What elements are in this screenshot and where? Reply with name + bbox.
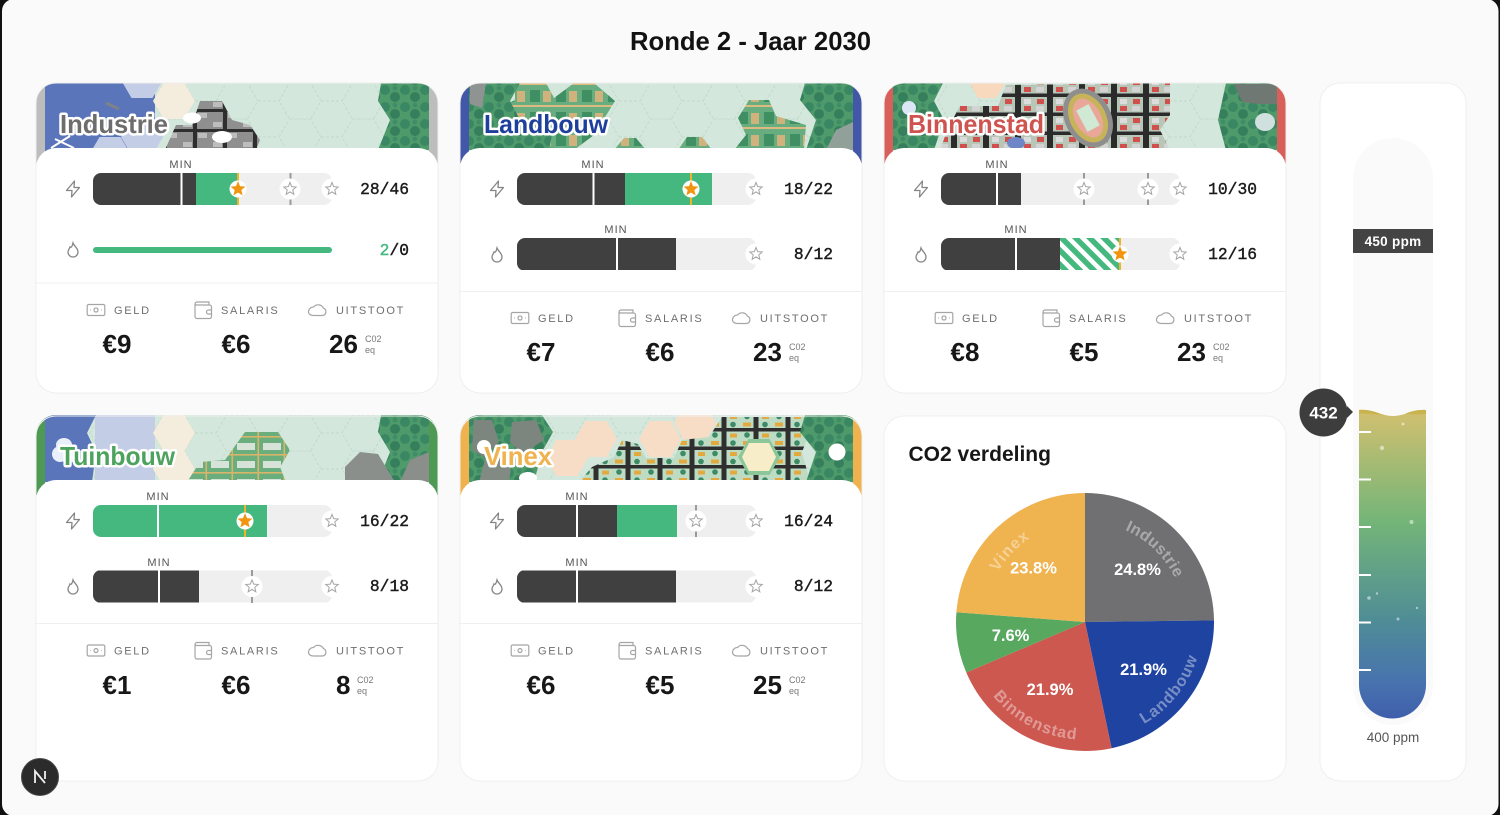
heat row [68, 241, 409, 260]
panel: Industrie [36, 62, 438, 393]
energy row: MIN [565, 491, 589, 503]
slice: Vinex [956, 493, 1085, 622]
map header: Tuinbouw [36, 415, 438, 496]
energy row: MIN [169, 159, 193, 171]
heat row: 8/12 [794, 577, 833, 596]
slice: Tuinbouw [956, 612, 1085, 672]
current value bubble: 432 [1309, 404, 1338, 422]
header label: Industrie [60, 109, 168, 139]
stats row: UITSTOOT [760, 646, 829, 658]
energy row [490, 491, 833, 537]
limit label [1353, 229, 1433, 253]
slice names: Industrie [1126, 520, 1182, 576]
stats row: €5 [1070, 337, 1098, 367]
stats row: GELD [538, 646, 575, 658]
card body [36, 480, 438, 781]
stats row: C02 [357, 675, 374, 685]
stats row: €8 [951, 337, 979, 367]
stats row: €6 [222, 670, 250, 700]
stats row: GELD [962, 313, 999, 325]
energy row [66, 159, 409, 205]
panel: CO2 verdeling [884, 416, 1286, 782]
stats row: SALARIS [1069, 313, 1127, 325]
energy row: 18/22 [784, 180, 833, 199]
stats row: SALARIS [221, 305, 279, 317]
panel: Vinex [460, 405, 862, 781]
panel: thermometer [1300, 83, 1466, 781]
stats row: €7 [527, 337, 555, 367]
card body [460, 480, 862, 781]
stats row: 23 [1177, 337, 1206, 367]
stats row: C02 [789, 675, 806, 685]
heat row: 8/18 [370, 577, 409, 596]
energy row: 10/30 [1208, 180, 1257, 199]
thermometer tube [1353, 138, 1433, 725]
stats row [87, 642, 405, 700]
minimum label: 400 ppm [1367, 730, 1419, 745]
stats row: 8 [336, 670, 350, 700]
stats row: eq [1213, 353, 1223, 363]
header label: Landbouw [484, 109, 609, 139]
stats row: GELD [114, 305, 151, 317]
heat row: 8/12 [794, 245, 833, 264]
stats row: eq [789, 686, 799, 696]
panel: Landbouw [460, 83, 862, 393]
energy row: 28/46 [360, 180, 409, 199]
stats row: GELD [114, 646, 151, 658]
map header: Landbouw [460, 84, 862, 164]
pie chart [956, 493, 1214, 751]
stats row: UITSTOOT [336, 305, 405, 317]
map header: Vinex [460, 415, 862, 496]
current value bubble [1300, 388, 1353, 436]
heat row: MIN [604, 224, 628, 236]
stats row: UITSTOOT [760, 313, 829, 325]
energy row [490, 159, 833, 205]
header label: Binnenstad [908, 109, 1044, 139]
stats row: C02 [789, 342, 806, 352]
stats row [511, 642, 829, 700]
stats row [511, 310, 829, 367]
heat row [68, 557, 409, 603]
stats row: SALARIS [221, 646, 279, 658]
heat row: MIN [1004, 224, 1028, 236]
bubbles [1367, 422, 1418, 620]
heat row: 12/16 [1208, 245, 1257, 264]
slice names: Vinex [988, 532, 1030, 568]
map header: Industrie [36, 84, 438, 164]
heat row [916, 224, 1257, 270]
stats row: 25 [753, 670, 782, 700]
stats row: €5 [646, 670, 674, 700]
slice percentages: 24.8% [1114, 561, 1161, 579]
heat row: 2/0 [380, 241, 409, 260]
stats row: eq [357, 686, 367, 696]
energy row: MIN [146, 491, 170, 503]
card body [36, 148, 438, 393]
card body [460, 148, 862, 393]
energy row: 16/22 [360, 512, 409, 531]
logo badge [22, 758, 58, 796]
slice percentages [992, 560, 1167, 699]
stats row: GELD [538, 313, 575, 325]
scale ticks [1359, 431, 1371, 671]
slice names: Binnenstad [994, 690, 1076, 740]
stats row: €1 [103, 670, 131, 700]
stats row: SALARIS [645, 646, 703, 658]
stats row: 26 [329, 329, 358, 359]
slice names: Landbouw [1139, 654, 1197, 724]
map header: Binnenstad [884, 84, 1286, 164]
stats row: €9 [103, 329, 131, 359]
panel: Binnenstad [884, 80, 1286, 393]
stats row: SALARIS [645, 313, 703, 325]
thermometer liquid [1359, 410, 1426, 718]
stats row: €6 [222, 329, 250, 359]
panel: Tuinbouw [36, 415, 438, 781]
stats row: eq [365, 345, 375, 355]
stats row [935, 310, 1253, 367]
slice: Binnenstad [966, 622, 1112, 751]
heat row [492, 224, 833, 270]
heat row: MIN [147, 557, 171, 569]
header label: Tuinbouw [60, 441, 176, 471]
slice percentages: 23.8% [1010, 560, 1057, 578]
title: Ronde 2 - Jaar 2030 [630, 28, 871, 56]
heat row [492, 557, 833, 603]
energy row: MIN [581, 159, 605, 171]
slice names [988, 520, 1197, 740]
chart heading: CO2 verdeling [908, 443, 1051, 466]
stats row: UITSTOOT [1184, 313, 1253, 325]
slice percentages: 7.6% [992, 627, 1030, 645]
heat row: MIN [565, 557, 589, 569]
card body [884, 148, 1286, 393]
slice: Landbouw [1085, 620, 1214, 748]
slice percentages: 21.9% [1027, 681, 1074, 699]
stats row: C02 [1213, 342, 1230, 352]
header label: Vinex [484, 441, 553, 471]
stats row [87, 302, 405, 359]
slice: Industrie [1085, 493, 1214, 622]
stats row: eq [789, 353, 799, 363]
slice percentages: 21.9% [1120, 661, 1167, 679]
stats row: €6 [646, 337, 674, 367]
stats row: C02 [365, 334, 382, 344]
stats row: 23 [753, 337, 782, 367]
energy row [66, 491, 409, 537]
stats row: €6 [527, 670, 555, 700]
limit label: 450 ppm [1365, 234, 1421, 249]
energy row [914, 159, 1257, 205]
energy row: 16/24 [784, 512, 833, 531]
energy row: MIN [985, 159, 1009, 171]
stats row: UITSTOOT [336, 646, 405, 658]
